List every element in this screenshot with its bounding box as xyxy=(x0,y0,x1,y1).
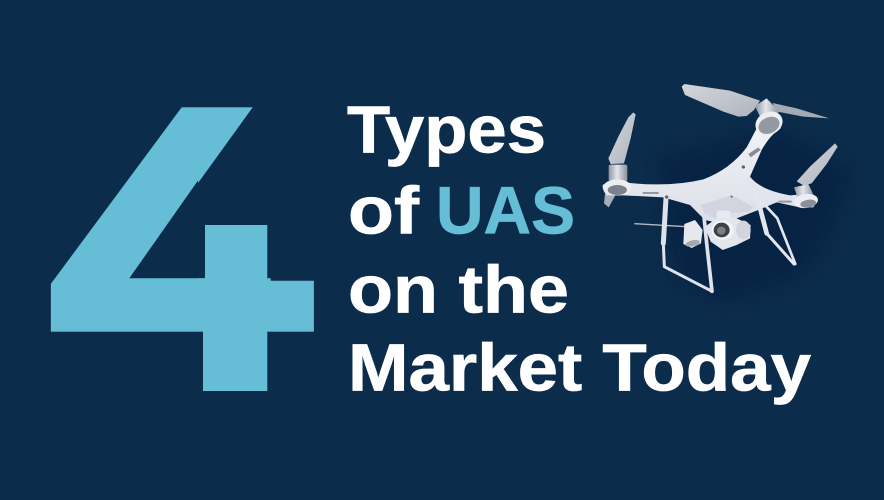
right landing leg xyxy=(747,178,795,264)
body vents and screws xyxy=(643,147,792,203)
rear motor xyxy=(683,220,703,248)
propeller: top right xyxy=(773,103,829,118)
propeller: right xyxy=(797,143,838,185)
title line: of UAS xyxy=(348,173,575,248)
title line: of UAS: of xyxy=(348,173,420,248)
propeller: left xyxy=(608,112,636,164)
drone photo illustration xyxy=(603,84,853,303)
camera gimbal xyxy=(705,211,751,250)
propeller: top left xyxy=(682,84,760,117)
left landing leg xyxy=(663,198,712,291)
title line: of UAS: UAS xyxy=(436,173,575,248)
title line: Market Today: Market Today xyxy=(348,331,811,406)
belly plate xyxy=(701,195,753,219)
title line: Types: Types xyxy=(347,93,546,168)
title xyxy=(347,93,811,406)
drone shadow xyxy=(657,127,853,303)
title line: on the: on the xyxy=(348,252,569,327)
right motor xyxy=(793,184,819,210)
left motor xyxy=(603,165,631,195)
big numeral 4: 4 xyxy=(49,11,314,474)
drone body xyxy=(603,118,817,223)
antenna xyxy=(634,224,687,227)
top motor xyxy=(752,98,786,140)
